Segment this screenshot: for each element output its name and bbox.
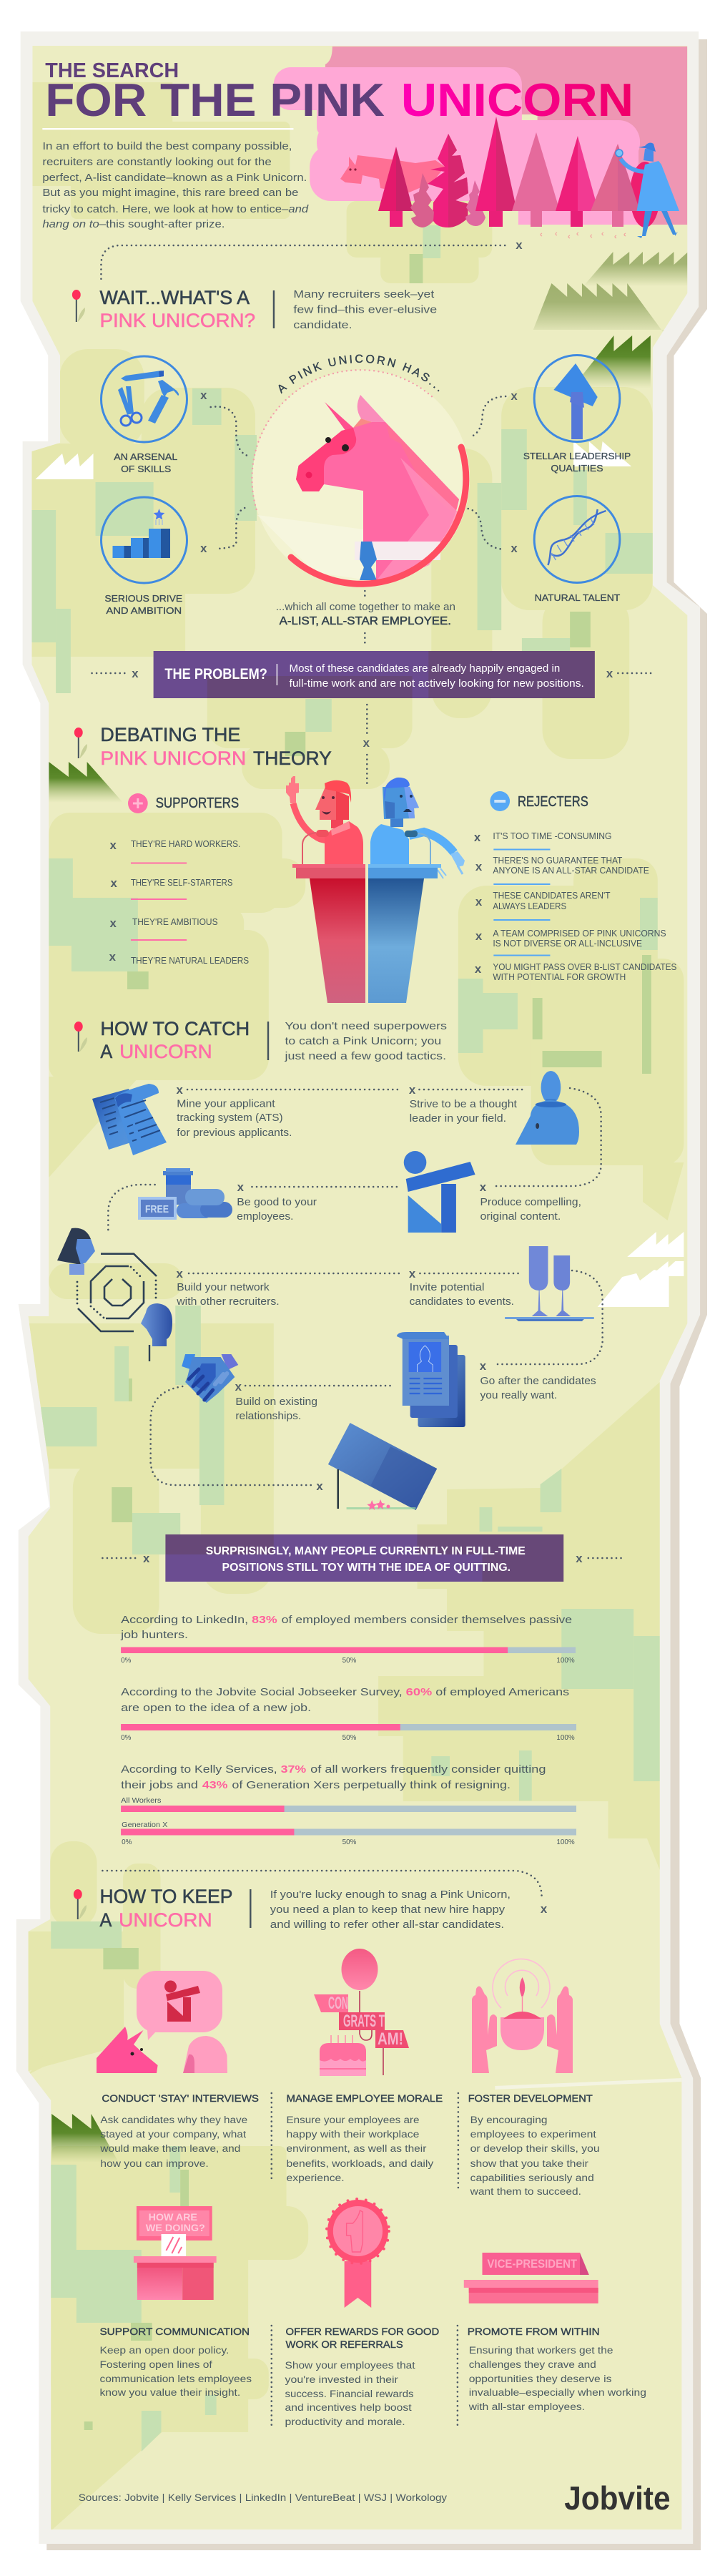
- chart: Jobvite stat: of employed Americans: [435, 1687, 569, 1698]
- icon: medal: [327, 2199, 389, 2308]
- icon: stay interview speech bubble: [97, 1971, 227, 2073]
- tactic: mine ATS: for previous applicants.: [177, 1127, 292, 1139]
- intro copy: [284, 1021, 447, 1062]
- tactic: thought leader: leader in your field.: [410, 1113, 506, 1125]
- icon: celebration balloon and cake: AM!: [378, 2029, 403, 2049]
- icon: jagged tree: [428, 134, 468, 227]
- chart: Jobvite stat: 0%: [121, 1734, 132, 1742]
- heading: WAIT...WHAT'S A: [99, 287, 250, 308]
- column: foster development: show that you take their: [470, 2158, 588, 2169]
- tactic: invite to events: Invite potential: [410, 1282, 484, 1293]
- connectors: traits to unicorn: [200, 388, 518, 555]
- column: support communication: Keep an open door policy.: [99, 2344, 229, 2356]
- column: manage employee morale: benefits, workloads, and daily: [287, 2158, 433, 2169]
- intro copy: few find–this ever-elusive: [293, 304, 437, 316]
- intro text: perfect, A-list candidate–known as a Pink Unicorn.: [42, 172, 307, 184]
- tactic: existing relationships: [235, 1380, 395, 1422]
- panel: rejecters: IS NOT DIVERSE OR ALL-INCLUSIVE: [493, 939, 642, 949]
- icon: leadership arrow in circle: [534, 355, 620, 442]
- intro copy: you need a plan to keep that new hire happy: [270, 1904, 506, 1916]
- icon: application papers: [92, 1084, 167, 1155]
- pink sky: [325, 46, 687, 225]
- icon: pin: [74, 1889, 87, 1919]
- heading: A: [99, 1909, 112, 1931]
- chart: Kelly Services stat: Generation X: [122, 1821, 168, 1829]
- connectors: problem: x: [132, 667, 139, 680]
- tactic: be good: x: [237, 1180, 245, 1194]
- connectors: callout: x: [143, 1552, 150, 1565]
- callout: surprisingly: POSITIONS STILL TOY WITH THE IDEA OF QUITTING.: [222, 1562, 511, 1574]
- tactic: build network: x: [177, 1267, 183, 1280]
- tactic: compelling content: [480, 1180, 581, 1223]
- column: manage employee morale: environment, as well as their: [287, 2142, 427, 2154]
- icon: tie: [360, 542, 377, 580]
- icon: promotion nameplate: [464, 2253, 598, 2303]
- icon: celebration balloon and cake: GRATS T: [343, 2012, 385, 2031]
- panel: rejecters: x: [475, 860, 483, 873]
- icon: rising bars in circle: [102, 497, 187, 583]
- decorative ridges: [586, 252, 688, 283]
- panel: rejecters: x: [474, 831, 481, 844]
- panel: supporters: SUPPORTERS: [156, 795, 239, 811]
- tactic: existing relationships: relationships.: [235, 1411, 301, 1422]
- column: promote from within: PROMOTE FROM WITHIN: [468, 2326, 600, 2337]
- chart: Jobvite stat: 60%: [406, 1687, 432, 1698]
- header illustration: forest, unicorn and detective: [340, 117, 679, 238]
- column: foster development: or develop their skills, you: [470, 2142, 600, 2154]
- tactic: invite to events: [409, 1267, 520, 1308]
- red debater: [286, 776, 363, 864]
- column: manage employee morale: experience.: [287, 2172, 345, 2183]
- section: debating: [74, 724, 332, 769]
- panel: supporters: x: [110, 916, 117, 930]
- heading: UNICORN: [119, 1909, 212, 1931]
- panel: rejecters: ALWAYS LEADERS: [493, 901, 566, 911]
- panel: rejecters: WITH POTENTIAL FOR GROWTH: [493, 972, 626, 982]
- section: what's a pink unicorn: [72, 287, 437, 331]
- icon: free perks: FREE: [145, 1203, 169, 1215]
- column: foster development: By encouraging: [470, 2114, 547, 2125]
- panel: supporters: THEY'RE HARD WORKERS.: [131, 839, 240, 849]
- column: promote from within: Ensuring that workers get the: [469, 2344, 613, 2356]
- connectors: traits to unicorn: x: [200, 542, 207, 555]
- icon: small shrub right: [465, 180, 485, 226]
- icon: hands nurturing a plant: [472, 1959, 573, 2073]
- icon: split tree: [556, 136, 598, 227]
- icon: far tree: [591, 144, 640, 227]
- tactic: compelling content: x: [480, 1180, 487, 1194]
- section: how to keep: [74, 1886, 511, 1931]
- column: promote from within: with all-star employees.: [468, 2401, 585, 2412]
- title: UNICORN: [401, 74, 633, 126]
- chart: Kelly Services stat: 100%: [556, 1838, 575, 1846]
- icon: plus: [128, 793, 148, 813]
- intro copy: You don't need superpowers: [285, 1021, 447, 1032]
- column: support communication: SUPPORT COMMUNICATION: [99, 2326, 250, 2337]
- column: manage employee morale: Ensure your employees are: [287, 2114, 420, 2125]
- callout: the problem: THE PROBLEM?: [164, 666, 267, 682]
- icon: celebration balloon and cake: CON: [328, 1994, 348, 2013]
- tactic: thought leader: [409, 1083, 524, 1125]
- chart: LinkedIn stat: 50%: [342, 1657, 357, 1665]
- icon: promotion nameplate: VICE-PRESIDENT: [487, 2257, 578, 2271]
- tactic: go after candidates: [480, 1359, 596, 1401]
- caption: all-star employee: A-LIST, ALL-STAR EMPLOYEE.: [280, 615, 451, 627]
- column: promote from within: invaluable–especially when working: [469, 2386, 646, 2398]
- column: promote from within: [468, 2326, 646, 2412]
- callout: surprisingly: [165, 1534, 563, 1582]
- tactic: go after candidates: Go after the candidates: [480, 1376, 596, 1387]
- icon: ballot box: [134, 2206, 217, 2300]
- intro copy: and willing to refer other all-star candidates.: [270, 1919, 504, 1931]
- panel: rejecters: ANYONE IS AN ALL-STAR CANDIDATE: [493, 866, 649, 876]
- icon: debaters and podium: [286, 776, 465, 1003]
- heading: DEBATING THE: [100, 724, 240, 745]
- caption: all-star employee: [276, 591, 455, 645]
- panel: rejecters: A TEAM COMPRISED OF PINK UNICORNS: [493, 929, 666, 939]
- tactic: be good: [237, 1180, 397, 1223]
- heading: HOW TO KEEP: [99, 1886, 232, 1907]
- icon: hidden unicorn: [340, 155, 445, 193]
- icon: tree one: [378, 147, 413, 227]
- intro text: [42, 141, 309, 230]
- panel: rejecters: REJECTERS: [518, 794, 588, 810]
- icon: networking people and target: [57, 1228, 172, 1361]
- chart: Kelly Services stat: their jobs and: [121, 1780, 198, 1791]
- tactic: invite to events: candidates to events.: [410, 1296, 514, 1308]
- intro text: In an effort to build the best company possible,: [42, 141, 292, 152]
- column: conduct stay interviews: how you can improve.: [100, 2158, 209, 2169]
- panel: supporters: x: [109, 950, 117, 964]
- column: promote from within: challenges they crave and: [469, 2359, 596, 2370]
- connectors: problem: x: [606, 667, 613, 680]
- connector: [497, 1270, 603, 1364]
- connector: [108, 1185, 155, 1230]
- panel: supporters: THEY'RE SELF-STARTERS: [131, 878, 232, 888]
- chart: LinkedIn stat: 100%: [556, 1657, 575, 1665]
- callout: the problem: Most of these candidates are already happily engaged in: [290, 663, 560, 675]
- intro copy: to catch a Pink Unicorn; you: [285, 1036, 441, 1047]
- column: manage employee morale: happy with their workplace: [287, 2128, 420, 2140]
- title: [45, 59, 633, 126]
- podium: [292, 864, 441, 1003]
- column: offer rewards: OFFER REWARDS FOR GOOD: [286, 2326, 439, 2337]
- panel: rejecters: [474, 791, 676, 982]
- panel: supporters: [109, 793, 249, 966]
- column: conduct stay interviews: CONDUCT 'STAY' INTERVIEWS: [102, 2092, 259, 2104]
- icon: unicorn trap: [328, 1423, 437, 1510]
- heading: [99, 1886, 232, 1931]
- panel: rejecters: x: [475, 895, 483, 909]
- panel: rejecters: YOU MIGHT PASS OVER B-LIST CANDIDATES: [493, 962, 676, 972]
- connectors: callout: x: [576, 1552, 583, 1565]
- labels: traits: AN ARSENAL: [114, 451, 177, 462]
- connectors: traits to unicorn: x: [200, 388, 207, 402]
- icon: tools in circle: [102, 356, 187, 442]
- tactic: mine ATS: tracking system (ATS): [177, 1112, 283, 1124]
- labels: traits: OF SKILLS: [121, 464, 172, 474]
- icon: tall tree: [475, 117, 517, 227]
- icon: minus: [490, 791, 510, 811]
- main text and diagram layer: x: [541, 1902, 548, 1916]
- panel: supporters: x: [111, 876, 117, 890]
- column: conduct stay interviews: would make them leave, and: [99, 2142, 240, 2154]
- icon: head with lever: [516, 1071, 579, 1145]
- tactic: be good: Be good to your: [237, 1197, 317, 1208]
- column: offer rewards: you're invested in their: [285, 2374, 398, 2385]
- column: offer rewards: Show your employees that: [285, 2359, 415, 2371]
- tactic: mine ATS: [177, 1083, 401, 1139]
- chart: Kelly Services stat: 37%: [281, 1764, 306, 1776]
- intro text: tricky to catch. Here, we look at how to entice– and: [42, 204, 309, 215]
- column: conduct stay interviews: Ask candidates why they have: [100, 2114, 247, 2125]
- title: FOR THE PINK: [45, 74, 385, 126]
- icon: unicorn head: [296, 395, 459, 583]
- column: foster development: [468, 2092, 600, 2197]
- connectors: traits to unicorn: x: [511, 389, 518, 403]
- connector: [151, 1386, 312, 1485]
- column: support communication: [99, 2326, 252, 2398]
- column: offer rewards: success. Financial rewards: [285, 2388, 414, 2399]
- heading: [100, 1018, 250, 1062]
- chart: LinkedIn stat: [120, 1615, 576, 1665]
- curved heading: A PINK UNICORN HAS...: [279, 355, 439, 393]
- caption: all-star employee: ...which all come together to make an: [276, 602, 455, 613]
- blue debater: [370, 778, 465, 878]
- icon: pin: [74, 728, 87, 758]
- icon: light tree: [512, 132, 560, 227]
- tactic: existing relationships: Build on existing: [235, 1396, 317, 1408]
- heading: UNICORN: [119, 1041, 212, 1062]
- icon: dna in circle: [534, 496, 620, 582]
- icon: figure producing content: [404, 1151, 475, 1233]
- chart: Jobvite stat: 50%: [342, 1734, 357, 1742]
- labels: traits: STELLAR LEADERSHIP: [523, 451, 631, 461]
- chart: LinkedIn stat: of employed members consider themselves passive: [282, 1615, 572, 1626]
- intro text: hang on to –this sought-after prize.: [42, 219, 225, 230]
- tactic: compelling content: Produce compelling,: [480, 1197, 581, 1208]
- panel: rejecters: THESE CANDIDATES AREN'T: [493, 891, 611, 901]
- tactic: build network: Build your network: [177, 1282, 270, 1293]
- chart: Kelly Services stat: 0%: [122, 1838, 132, 1846]
- chart: Kelly Services stat: [121, 1764, 576, 1846]
- tactic: thought leader: x: [409, 1083, 416, 1097]
- logo: Jobvite: Jobvite: [564, 2480, 671, 2517]
- tactic: existing relationships: x: [235, 1380, 242, 1394]
- connectors: traits to unicorn: x: [511, 542, 518, 555]
- intro copy: If you're lucky enough to snag a Pink Unicorn,: [270, 1889, 511, 1901]
- connector: [102, 1871, 542, 1896]
- column: conduct stay interviews: [99, 2092, 259, 2169]
- chart: Kelly Services stat: of Generation Xers perpetually think of resigning.: [232, 1780, 511, 1791]
- column: support communication: communication lets employees: [99, 2373, 252, 2384]
- connector: intro to section one: [101, 238, 523, 280]
- labels: traits: [104, 451, 631, 616]
- chart: Kelly Services stat: According to Kelly Services,: [121, 1764, 277, 1776]
- chart: Jobvite stat: 100%: [556, 1734, 575, 1742]
- connector: intro to section one: x: [516, 238, 523, 252]
- column: manage employee morale: [287, 2092, 443, 2183]
- column: offer rewards: [285, 2326, 439, 2427]
- column: foster development: capabilities seriously and: [470, 2172, 594, 2183]
- connectors: problem: x: [363, 736, 370, 750]
- chart: LinkedIn stat: job hunters.: [120, 1630, 188, 1641]
- sources: Sources: Jobvite | Kelly Services | LinkedIn | VentureBeat | WSJ | Workology: [79, 2492, 447, 2503]
- panel: supporters: x: [110, 838, 117, 852]
- tactic: be good: employees.: [237, 1211, 293, 1223]
- tactic: thought leader: Strive to be a thought: [410, 1099, 518, 1110]
- column: offer rewards: WORK OR REFERRALS: [286, 2339, 403, 2350]
- intro copy: Many recruiters seek–yet: [293, 289, 435, 300]
- intro copy: [270, 1889, 511, 1931]
- tactic: invite to events: x: [409, 1267, 416, 1280]
- column: promote from within: opportunities they deserve is: [469, 2373, 612, 2384]
- intro text: recruiters are constantly looking out for the: [42, 157, 272, 168]
- icon: candidate profiles: [397, 1332, 465, 1427]
- heading: [100, 724, 332, 769]
- chart: Kelly Services stat: 50%: [342, 1838, 357, 1846]
- panel: rejecters: THERE'S NO GUARANTEE THAT: [493, 856, 623, 866]
- connectors: callout: [102, 1552, 624, 1565]
- tactic: go after candidates: you really want.: [480, 1390, 557, 1401]
- panel: rejecters: IT'S TOO TIME -CONSUMING: [493, 831, 611, 841]
- column: offer rewards: and incentives help boost: [285, 2401, 412, 2413]
- tactic: build network: [176, 1267, 403, 1308]
- chart: Kelly Services stat: of all workers frequently consider quitting: [310, 1764, 546, 1776]
- heading: PINK UNICORN: [100, 748, 246, 769]
- icon: pin: [74, 1022, 87, 1052]
- column: support communication: know you value their insight.: [99, 2386, 240, 2398]
- intro copy: [293, 289, 437, 331]
- heading: HOW TO CATCH: [100, 1018, 250, 1039]
- labels: traits: SERIOUS DRIVE: [104, 593, 183, 604]
- icon: champagne glasses: [505, 1246, 594, 1321]
- chart: Jobvite stat: According to the Jobvite Social Jobseeker Survey,: [121, 1687, 403, 1698]
- chart: LinkedIn stat: 83%: [252, 1615, 277, 1626]
- chart: Kelly Services stat: 43%: [202, 1780, 227, 1791]
- tactic: go after candidates: x: [480, 1359, 487, 1373]
- icon: small shrub: [410, 173, 434, 227]
- tactic: mine ATS: Mine your applicant: [177, 1098, 276, 1110]
- connectors: problem: [92, 667, 654, 785]
- intro copy: candidate.: [293, 320, 352, 331]
- column: foster development: employees to experiment: [470, 2128, 596, 2140]
- tactic: build network: with other recruiters.: [176, 1296, 280, 1308]
- chart: Jobvite stat: are open to the idea of a new job.: [121, 1703, 311, 1714]
- callout: the problem: [154, 651, 595, 698]
- column: conduct stay interviews: stayed at your company, what: [100, 2128, 246, 2140]
- column: foster development: want them to succeed.: [470, 2185, 581, 2197]
- panel: supporters: THEY'RE NATURAL LEADERS: [131, 956, 249, 966]
- panel: unicorn medallion: [251, 355, 470, 587]
- connector: [495, 1088, 601, 1186]
- tactic: compelling content: original content.: [480, 1211, 561, 1223]
- icon: pin: [72, 290, 85, 322]
- icon: detective with magnifier: [616, 143, 679, 238]
- chart: Jobvite stat: [121, 1687, 576, 1742]
- collar: [355, 542, 440, 560]
- heading: [99, 287, 255, 331]
- heading: THEORY: [253, 748, 332, 769]
- column: offer rewards: productivity and morale.: [285, 2416, 405, 2427]
- icon: ballot box: WE DOING?: [146, 2222, 205, 2233]
- chart: Kelly Services stat: All Workers: [121, 1797, 162, 1805]
- column: manage employee morale: MANAGE EMPLOYEE MORALE: [287, 2092, 443, 2104]
- section: how to catch: [74, 1018, 447, 1062]
- labels: traits: AND AMBITION: [106, 605, 182, 616]
- callout: surprisingly: SURPRISINGLY, MANY PEOPLE CURRENTLY IN FULL-TIME: [206, 1545, 526, 1557]
- chart: LinkedIn stat: 0%: [121, 1657, 132, 1665]
- icon: handshake: [182, 1354, 238, 1403]
- icon: celebration balloon and cake: [314, 1949, 409, 2076]
- panel: rejecters: x: [475, 962, 482, 976]
- icon: ballot box: HOW ARE: [149, 2211, 197, 2223]
- heading: A: [100, 1041, 112, 1062]
- footprints: [541, 232, 626, 238]
- title: THE SEARCH: [45, 59, 179, 82]
- tactic: mine ATS: x: [177, 1083, 183, 1097]
- heading: PINK UNICORN?: [99, 310, 255, 331]
- chart: LinkedIn stat: According to LinkedIn,: [121, 1615, 248, 1626]
- main text and diagram layer: x: [316, 1479, 323, 1493]
- intro copy: just need a few good tactics.: [284, 1051, 446, 1062]
- intro text: But as you might imagine, this rare breed can be: [42, 187, 298, 199]
- column: foster development: FOSTER DEVELOPMENT: [468, 2092, 593, 2104]
- panel: rejecters: x: [475, 929, 483, 943]
- labels: traits: NATURAL TALENT: [535, 592, 620, 603]
- icon: free perks: [138, 1168, 232, 1220]
- column: support communication: Fostering open lines of: [99, 2359, 212, 2370]
- labels: traits: QUALITIES: [551, 463, 603, 474]
- panel: supporters: THEY'RE AMBITIOUS: [132, 917, 218, 927]
- callout: the problem: full-time work and are not actively looking for new positions.: [290, 678, 584, 690]
